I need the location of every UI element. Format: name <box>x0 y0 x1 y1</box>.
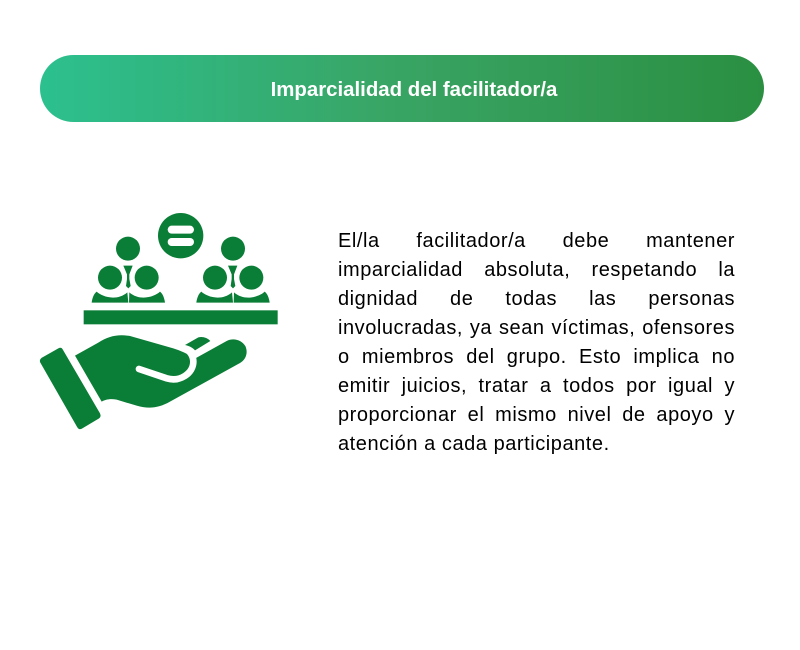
body text: dignidad de todas las personas <box>338 288 735 310</box>
icon: hand holding people with equality sign <box>40 213 278 430</box>
body text: proporcionar el mismo nivel de apoyo y <box>338 404 735 426</box>
body text: involucradas, ya sean víctimas, ofensores <box>338 317 735 339</box>
title banner <box>40 55 764 122</box>
icon: equals badge <box>158 213 203 258</box>
icon: right group of people <box>196 237 270 303</box>
icon: left group of people <box>92 237 165 303</box>
icon: hand <box>40 335 247 429</box>
icon: tray <box>84 310 278 324</box>
body text: o miembros del grupo. Esto implica no <box>338 346 735 368</box>
body text: El/la facilitador/a debe mantener <box>338 230 735 252</box>
body text: atención a cada participante. <box>338 433 610 455</box>
body text <box>338 230 735 455</box>
body text: imparcialidad absoluta, respetando la <box>338 259 735 281</box>
title: Imparcialidad del facilitador/a <box>271 79 557 101</box>
body text: emitir juicios, tratar a todos por igual y <box>338 375 735 397</box>
